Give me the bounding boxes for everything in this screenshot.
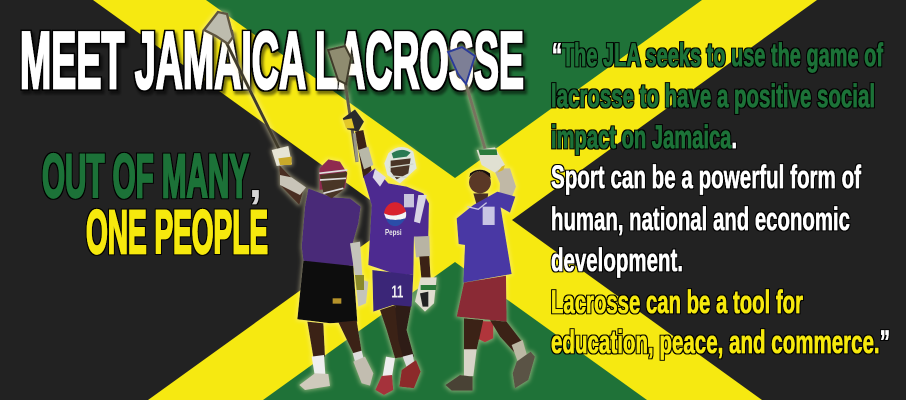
quote: white sentence: development. (551, 242, 683, 278)
quote text block (551, 37, 890, 360)
quote: green sentence: impact on Jamaica. (551, 119, 737, 155)
quote: white sentence (551, 159, 861, 278)
quote: yellow sentence (551, 284, 890, 360)
flag: top green triangle (206, 0, 702, 178)
lacrosse players photo (204, 12, 535, 395)
motto: comma: , (249, 155, 262, 207)
stick: right player (448, 47, 486, 152)
player: left, purple shirt and black shorts (272, 146, 373, 390)
infographic canvas: ONE PEOPLE (86, 198, 268, 266)
quote: green sentence (551, 37, 883, 155)
motto: OUT OF MANY (42, 142, 249, 210)
jersey sponsor: Pepsi (385, 227, 402, 237)
motto (42, 142, 268, 266)
flag: bottom green triangle (263, 262, 647, 400)
stick: left player (204, 12, 282, 155)
stick: middle player (328, 46, 357, 162)
flag: right black triangle (512, 0, 906, 400)
jersey number: 11 (391, 281, 404, 301)
flag: left black triangle (0, 0, 398, 400)
player: right, blue shirt and maroon shorts (445, 147, 535, 391)
player: middle, Pepsi jersey number 11 (343, 109, 437, 395)
